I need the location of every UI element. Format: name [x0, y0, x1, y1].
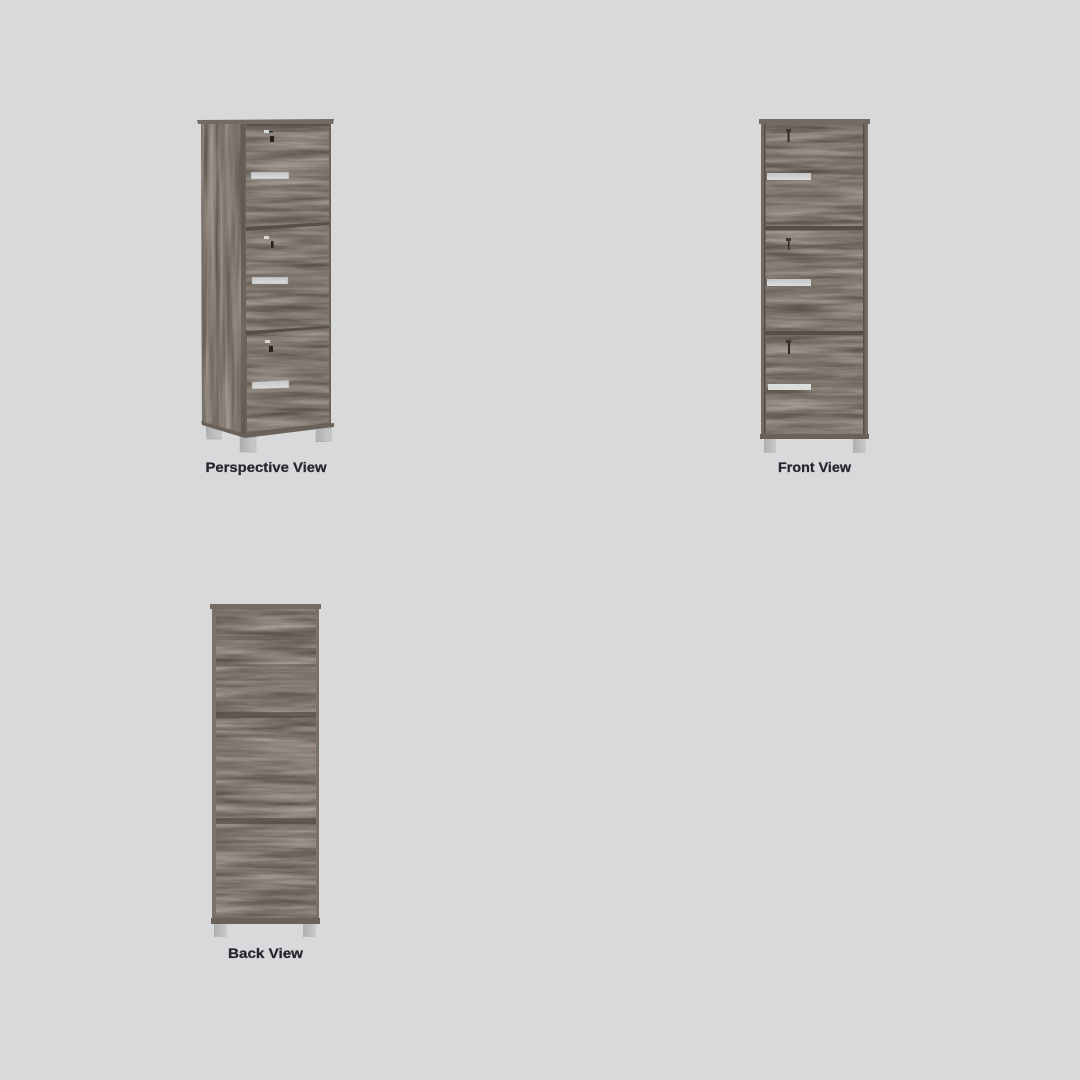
key, top drawer [786, 129, 791, 142]
key, middle drawer [786, 238, 791, 250]
label: perspective view: Perspective View [206, 459, 327, 475]
cabinet legs, perspective [206, 426, 331, 452]
top slab, back [210, 604, 321, 609]
front frame, perspective [245, 124, 331, 437]
bottom drawer, front [766, 336, 864, 434]
top slab, front [759, 119, 870, 124]
side panel, perspective [201, 124, 245, 438]
base slab, back [211, 918, 320, 924]
cabinet legs, front [764, 439, 866, 453]
base slab, perspective [201, 421, 334, 438]
drawer seams, front [764, 124, 864, 434]
handle, middle drawer [252, 277, 288, 284]
lock and key, bottom drawer [265, 340, 273, 352]
panel: front view [759, 119, 870, 475]
middle drawer, perspective [246, 226, 329, 330]
handle, top drawer [767, 173, 811, 180]
drawer seams, perspective [246, 222, 329, 335]
label: back view: Back View [228, 945, 303, 961]
cabinet body, front [761, 124, 868, 435]
top slab, perspective [197, 119, 334, 124]
bottom drawer, perspective [247, 330, 329, 432]
lock and key, top drawer [264, 130, 274, 142]
handle, bottom drawer [768, 384, 811, 390]
base slab, front [760, 434, 869, 439]
top drawer, perspective [246, 124, 329, 226]
handle, top drawer [251, 172, 289, 179]
panel: back view [210, 604, 321, 961]
handle, bottom drawer [252, 380, 289, 389]
panel: perspective view [197, 119, 334, 475]
cabinet legs, back [214, 923, 316, 937]
label: front view: Front View [778, 459, 851, 475]
top drawer, front [765, 125, 864, 226]
key, bottom drawer [786, 340, 791, 354]
back board [216, 609, 316, 919]
handle, middle drawer [767, 279, 811, 286]
cabinet body, back [212, 608, 319, 919]
middle drawer, front [765, 231, 864, 331]
lock and key, middle drawer [264, 236, 274, 248]
